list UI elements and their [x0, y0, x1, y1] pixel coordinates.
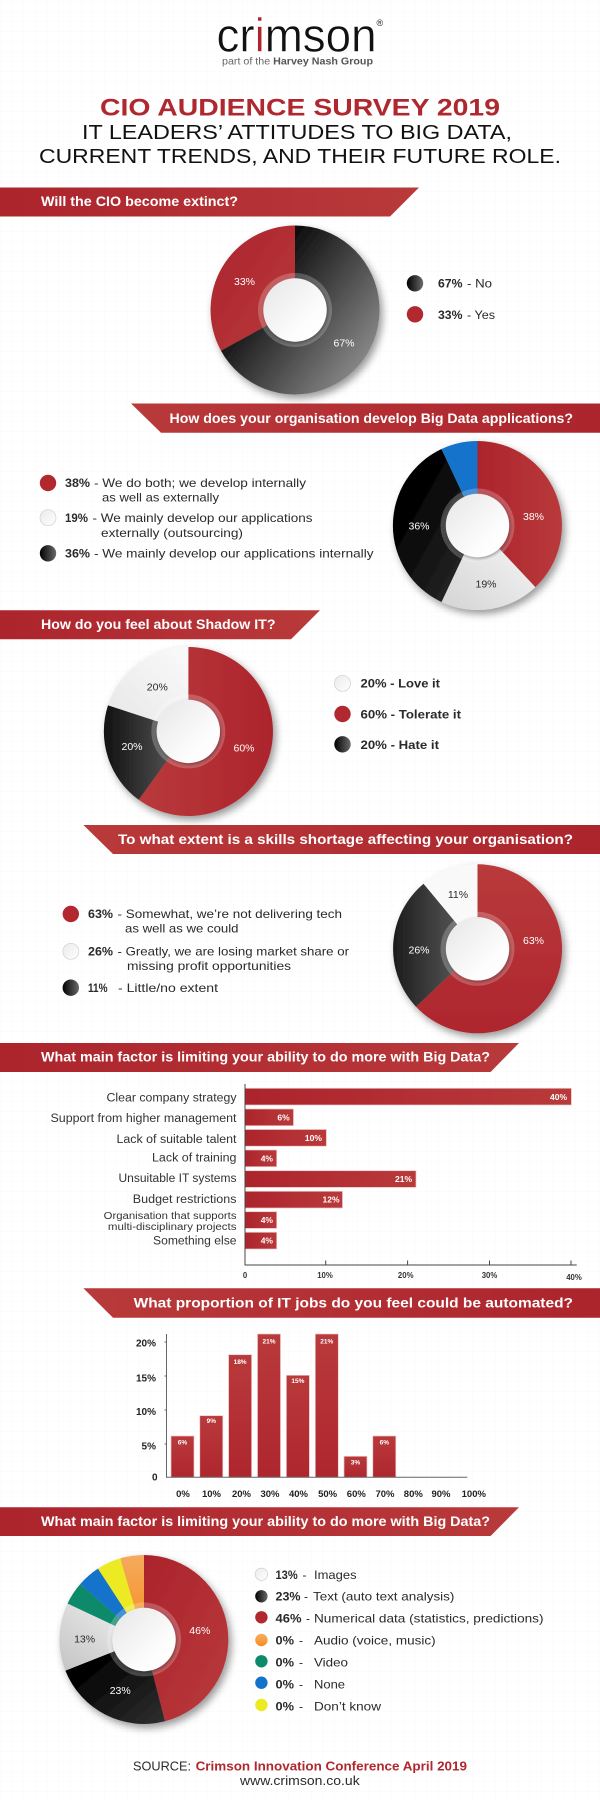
- bars: [245, 1088, 571, 1249]
- legend: - We mainly develop our applications: [92, 511, 312, 525]
- legend: Audio (voice, music): [314, 1634, 436, 1648]
- axis labels: [243, 1271, 582, 1282]
- x axis labels: 0%: [176, 1489, 190, 1500]
- banner heading: [131, 404, 600, 433]
- legend: - Greatly, we are losing market share or: [118, 944, 349, 958]
- legend: -: [304, 1590, 308, 1604]
- source footer: [133, 1758, 467, 1788]
- banner heading: What main factor is limiting your ability to do more with Big Data?: [41, 1513, 490, 1529]
- axes: [245, 1084, 577, 1265]
- axis labels: 0: [243, 1271, 248, 1280]
- legend: -: [299, 1656, 303, 1670]
- source footer: Crimson Innovation Conference April 2019: [196, 1758, 467, 1774]
- donut chart: [211, 225, 380, 394]
- legend: Images: [314, 1568, 357, 1582]
- column values: 18%: [234, 1359, 247, 1366]
- legend: - Yes: [467, 308, 495, 322]
- legend: - Somewhat, we’re not delivering tech: [118, 907, 342, 921]
- y axis labels: 5%: [142, 1442, 156, 1452]
- banner heading: How does your organisation develop Big Data applications?: [170, 410, 573, 426]
- legend: as well as externally: [102, 490, 219, 504]
- banner heading: [0, 1507, 519, 1536]
- legend: -: [306, 1612, 310, 1626]
- y axis labels: [136, 1338, 158, 1484]
- panel: data types donut: [0, 1507, 544, 1724]
- legend: 0%: [276, 1700, 294, 1714]
- x axis labels: 90%: [431, 1489, 451, 1500]
- legend: 38%: [65, 476, 90, 490]
- column values: 9%: [207, 1418, 216, 1425]
- banner heading: Will the CIO become extinct?: [41, 193, 238, 209]
- column values: [178, 1338, 389, 1466]
- donut chart: 13%: [74, 1633, 95, 1645]
- x axis labels: 30%: [260, 1489, 280, 1500]
- logo: crimson: part of the Harvey Nash Group: [222, 56, 373, 68]
- column values: 15%: [291, 1378, 305, 1385]
- donut chart: 26%: [408, 944, 430, 956]
- legend: -: [299, 1634, 303, 1648]
- axis labels: 30%: [482, 1271, 497, 1280]
- panel: IT jobs automated column chart: [83, 1288, 600, 1500]
- category labels: Organisation that supports: [104, 1211, 237, 1222]
- bar values: 4%: [261, 1215, 273, 1225]
- legend: 26%: [88, 944, 113, 958]
- title: [39, 94, 561, 168]
- column values: 6%: [178, 1440, 187, 1446]
- bar values: 10%: [305, 1133, 322, 1143]
- bar values: 12%: [322, 1195, 340, 1205]
- banner heading: [0, 188, 419, 216]
- title: CURRENT TRENDS, AND THEIR FUTURE ROLE.: [39, 146, 561, 168]
- donut chart: 20%: [147, 682, 168, 694]
- legend: 46%: [276, 1612, 302, 1626]
- donut chart: [104, 647, 273, 816]
- panel: will the CIO become extinct: [0, 188, 495, 394]
- x axis labels: 60%: [347, 1489, 366, 1500]
- category labels: [50, 1092, 237, 1248]
- legend: 33%: [438, 308, 463, 322]
- legend: - Little/no extent: [118, 981, 219, 995]
- legend: - We mainly develop our applications internally: [94, 546, 374, 560]
- x axis labels: 100%: [462, 1489, 486, 1500]
- legend: 0%: [276, 1656, 294, 1670]
- banner heading: [0, 610, 320, 639]
- legend: 23%: [276, 1590, 301, 1604]
- donut chart: 20%: [121, 741, 143, 753]
- axes: [164, 1334, 467, 1477]
- donut chart: 67%: [333, 338, 355, 350]
- legend: 19%: [65, 511, 88, 525]
- banner heading: To what extent is a skills shortage affecting your organisation?: [118, 831, 573, 847]
- axis labels: 40%: [566, 1273, 582, 1282]
- x axis labels: 10%: [202, 1489, 222, 1500]
- donut chart: 36%: [408, 521, 430, 533]
- banner heading: [0, 1043, 519, 1072]
- category labels: Lack of training: [152, 1152, 236, 1164]
- banner heading: What main factor is limiting your ability to do more with Big Data?: [41, 1049, 490, 1065]
- panel: develop big data applications: [40, 404, 600, 610]
- axis labels: 20%: [398, 1271, 414, 1280]
- donut chart: 33%: [234, 276, 255, 288]
- x axis labels: 80%: [404, 1489, 423, 1500]
- title: IT LEADERS’ ATTITUDES TO BIG DATA,: [82, 122, 512, 144]
- y axis labels: 10%: [136, 1407, 156, 1418]
- legend: - No: [467, 276, 492, 290]
- category labels: multi-disciplinary projects: [108, 1222, 236, 1233]
- legend: -: [299, 1678, 303, 1692]
- source footer: www.crimson.co.uk: [239, 1773, 360, 1788]
- legend: [255, 1568, 544, 1714]
- panel: limiting factor bar chart: [0, 1043, 582, 1282]
- category labels: Support from higher management: [50, 1113, 237, 1125]
- column values: 21%: [262, 1338, 276, 1346]
- legend: 60% - Tolerate it: [360, 707, 461, 721]
- bar values: 21%: [395, 1174, 412, 1184]
- title: CIO AUDIENCE SURVEY 2019: [100, 94, 500, 122]
- legend: None: [314, 1678, 345, 1692]
- category labels: Unsuitable IT systems: [118, 1173, 237, 1185]
- donut chart: 11%: [448, 889, 468, 901]
- legend: 0%: [276, 1678, 294, 1692]
- column chart: [136, 1334, 486, 1500]
- legend: [334, 675, 461, 752]
- legend: 63%: [88, 907, 113, 921]
- donut chart: 60%: [233, 743, 255, 755]
- axis labels: 10%: [317, 1271, 333, 1280]
- legend: -: [302, 1568, 306, 1582]
- donut chart: 38%: [523, 511, 544, 523]
- bar values: 40%: [550, 1092, 567, 1102]
- legend: - We do both; we develop internally: [94, 476, 306, 490]
- category labels: Something else: [153, 1236, 236, 1248]
- legend: Video: [314, 1656, 348, 1670]
- legend: [40, 475, 374, 562]
- legend: [407, 275, 495, 322]
- legend: externally (outsourcing): [101, 526, 243, 540]
- source footer: SOURCE:: [133, 1758, 191, 1774]
- logo: crimson: ®: [376, 18, 384, 28]
- legend: 20% - Love it: [360, 677, 440, 691]
- legend: Don’t know: [314, 1700, 381, 1714]
- bar values: 4%: [261, 1236, 273, 1246]
- donut chart: 46%: [189, 1625, 210, 1637]
- panel: skills shortage: [63, 825, 600, 1033]
- horizontal bar chart: [50, 1084, 582, 1282]
- bar values: 6%: [277, 1112, 290, 1122]
- logo: crimson: crimson: [216, 8, 376, 62]
- category labels: Clear company strategy: [106, 1092, 237, 1104]
- column values: 21%: [320, 1338, 334, 1346]
- donut chart: 63%: [523, 935, 544, 947]
- legend: 20% - Hate it: [360, 738, 439, 752]
- category labels: Budget restrictions: [133, 1194, 237, 1206]
- legend: missing profit opportunities: [127, 959, 291, 973]
- legend: -: [299, 1700, 303, 1714]
- legend: Numerical data (statistics, predictions): [314, 1612, 544, 1626]
- x axis labels: 50%: [318, 1489, 338, 1500]
- y axis labels: 0: [152, 1472, 158, 1484]
- legend: as well as we could: [125, 922, 238, 936]
- banner heading: How do you feel about Shadow IT?: [41, 616, 276, 632]
- banner heading: What proportion of IT jobs do you feel could be automated?: [134, 1294, 573, 1310]
- donut chart: [393, 441, 562, 610]
- legend: 36%: [65, 546, 90, 560]
- y axis labels: 15%: [136, 1374, 156, 1384]
- panel: shadow IT: [0, 610, 461, 816]
- legend: 0%: [276, 1634, 294, 1648]
- category labels: Lack of suitable talent: [116, 1134, 237, 1146]
- legend: [63, 906, 349, 996]
- x axis labels: 40%: [289, 1489, 309, 1500]
- banner heading: [83, 1288, 600, 1318]
- columns: [171, 1334, 396, 1477]
- column values: 3%: [351, 1460, 360, 1466]
- donut chart: 23%: [110, 1685, 131, 1697]
- x axis labels: 20%: [232, 1489, 252, 1500]
- x axis labels: [176, 1489, 486, 1500]
- donut chart: [393, 864, 562, 1033]
- column values: 6%: [380, 1440, 389, 1446]
- donut chart: 19%: [475, 578, 497, 590]
- x axis labels: 70%: [375, 1489, 395, 1500]
- donut chart: [59, 1555, 228, 1724]
- legend: 67%: [438, 276, 463, 290]
- legend: 13%: [276, 1568, 298, 1582]
- y axis labels: 20%: [136, 1338, 156, 1350]
- bar values: [261, 1092, 567, 1246]
- legend: Text (auto text analysis): [313, 1590, 454, 1604]
- banner heading: [83, 825, 600, 854]
- bar values: 4%: [261, 1153, 273, 1163]
- legend: 11%: [88, 981, 108, 995]
